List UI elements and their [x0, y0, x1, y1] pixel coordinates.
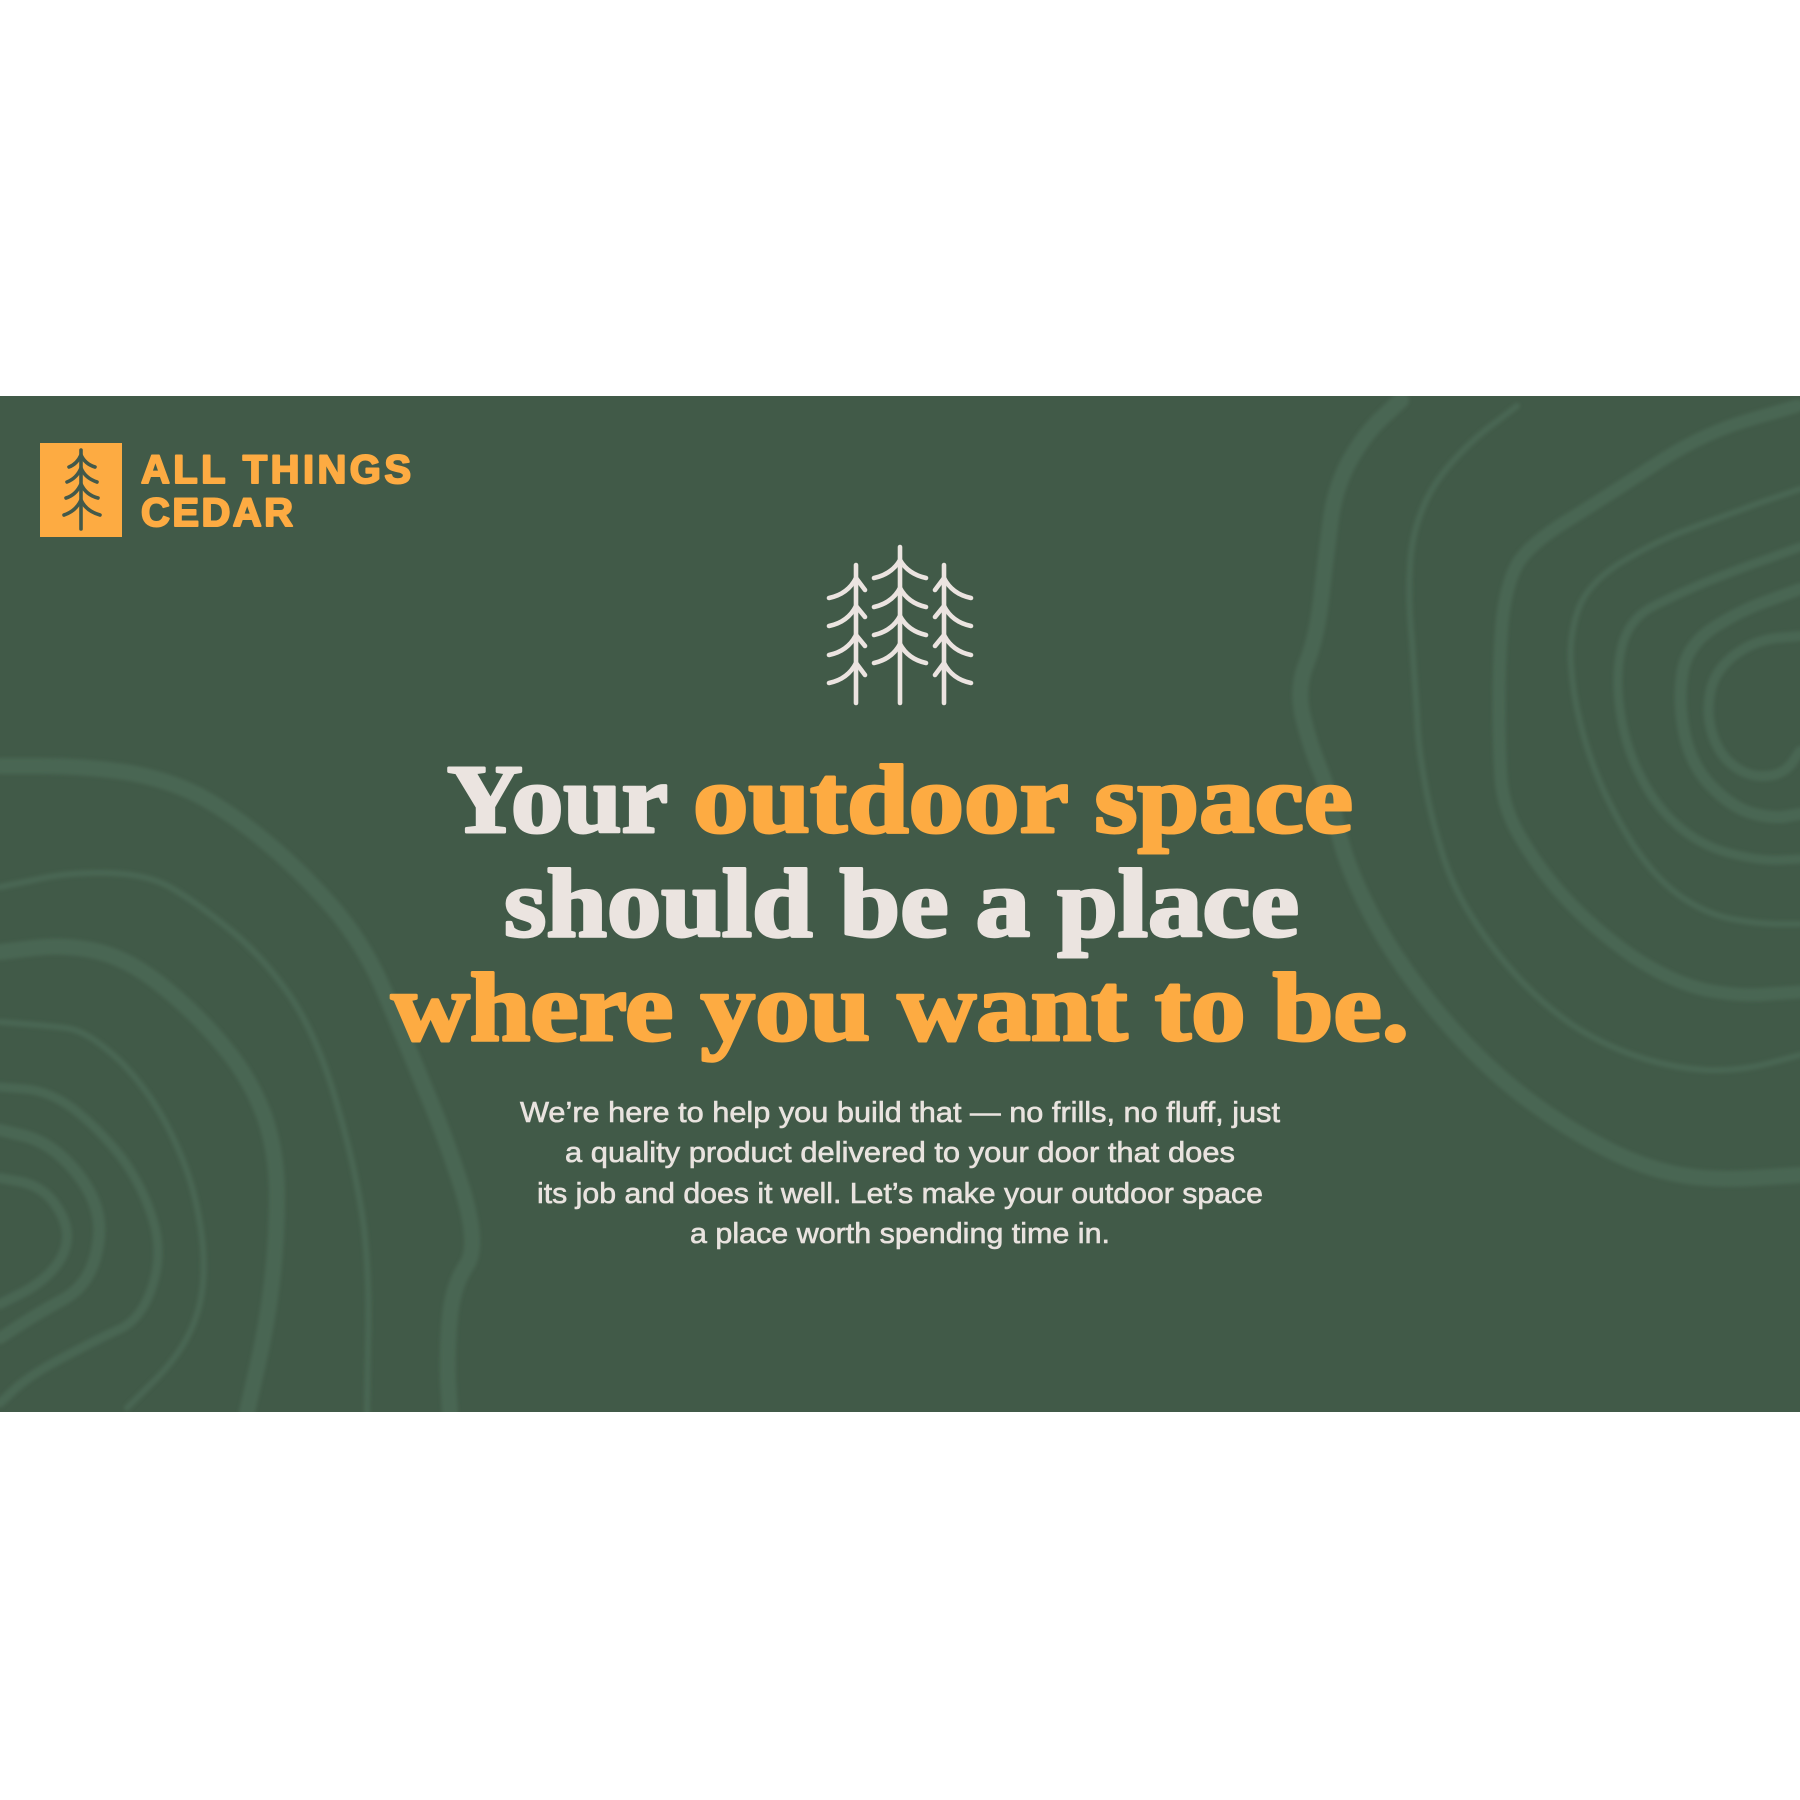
heading: Your — [447, 746, 668, 854]
heading — [391, 746, 1409, 1062]
body text — [520, 1097, 1280, 1250]
icon: three trees — [829, 547, 971, 703]
body text: its job and does it well. Let’s make your outdoor space — [537, 1178, 1263, 1210]
heading: outdoor space — [693, 746, 1353, 854]
logo — [40, 443, 411, 537]
logo wordmark: ALL THINGS — [141, 448, 411, 492]
logo wordmark — [141, 448, 411, 535]
heading: where you want to be. — [391, 954, 1409, 1062]
panel: green banner — [0, 396, 1800, 1412]
tree rings: left — [0, 766, 472, 1412]
logo wordmark: CEDAR — [141, 491, 293, 535]
infographic canvas — [0, 396, 1800, 1412]
body text: We’re here to help you build that — no frills, no fluff, just — [520, 1097, 1280, 1129]
body text: a place worth spending time in. — [690, 1218, 1110, 1250]
tree rings: right — [1300, 400, 1800, 1179]
icon: logo tile with cedar tree — [40, 443, 122, 537]
body text: a quality product delivered to your door that does — [565, 1137, 1235, 1169]
heading: should be a place — [504, 850, 1299, 958]
